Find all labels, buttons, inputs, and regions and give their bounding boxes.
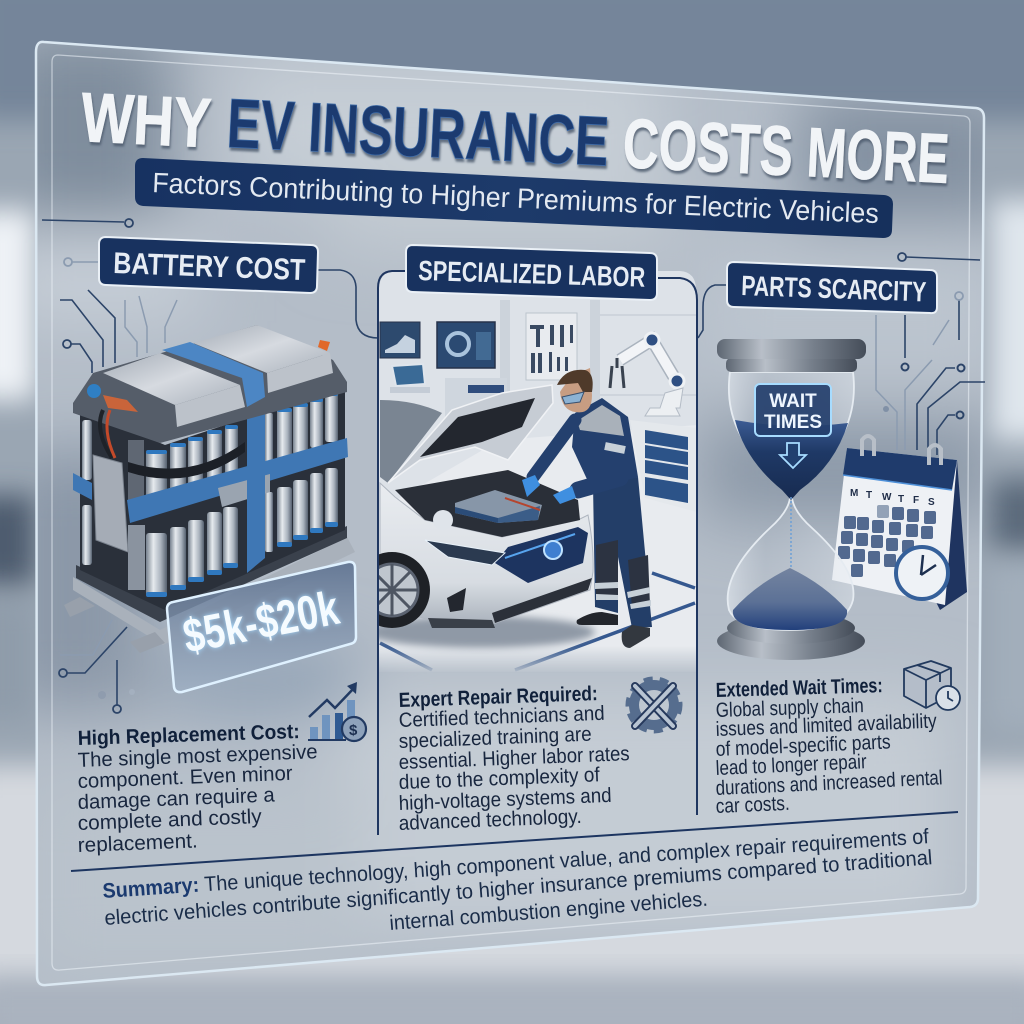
calendar: T (866, 490, 872, 501)
text block: expert repair required: Certified technicians and (398, 702, 605, 732)
battery base tray (64, 526, 355, 653)
electric car (354, 385, 595, 648)
panel: battery cost illustration (64, 325, 355, 653)
text block: expert repair required: Expert Repair Required: (398, 682, 598, 712)
summary text: Summary: The unique technology, high component value, and complex repair requirements of (102, 825, 930, 903)
text block: expert repair required: due to the complexity of (398, 763, 600, 794)
calendar: S (928, 497, 935, 508)
text block: extended wait times (715, 674, 943, 818)
top tray and lids (73, 325, 347, 443)
panel: parts scarcity illustration (717, 339, 967, 660)
title: MORE (805, 113, 951, 198)
heading: parts scarcity: PARTS SCARCITY (741, 270, 927, 307)
text block: extended wait times: car costs. (715, 792, 790, 818)
summary text: electric vehicles contribute significantly to higher insurance premiums compared to traditional (104, 846, 933, 930)
panel: specialized labor (354, 271, 697, 835)
hourglass cap (717, 339, 866, 372)
icon: wrench and gear (628, 679, 680, 731)
calendar: W (882, 492, 892, 503)
icon: rising chart with coin (308, 682, 366, 741)
wall screens (380, 322, 495, 368)
calendar (832, 436, 967, 610)
calendar: T (898, 494, 904, 505)
text block: extended wait times: issues and limited availability (715, 710, 938, 741)
text block: high replacement cost (77, 720, 318, 857)
title: COSTS (621, 104, 795, 190)
dark cell backing (80, 385, 345, 610)
text block: expert repair required: high-voltage systems and (398, 784, 612, 815)
cables and connectors (87, 384, 138, 458)
text block: high replacement cost: component. Even minor (77, 762, 293, 793)
calendar: M (850, 488, 858, 499)
circuit traces (42, 219, 985, 713)
wait times label: WAIT (769, 391, 817, 412)
heading: battery cost (99, 237, 318, 293)
title: WHY (79, 78, 213, 162)
text block: high replacement cost: complete and costly (77, 805, 263, 835)
workshop scene (354, 271, 697, 672)
text block: extended wait times: Global supply chain (715, 694, 864, 722)
heading: battery cost: BATTERY COST (113, 247, 306, 287)
text block: extended wait times: durations and increased rental (715, 766, 943, 800)
heading: parts scarcity (727, 262, 937, 313)
heading: specialized labor: SPECIALIZED LABOR (418, 255, 646, 293)
laptop and desk (390, 365, 504, 416)
icon: rising chart with coin: $ (349, 722, 358, 739)
summary text: internal combustion engine vehicles. (389, 888, 708, 935)
price tag: $5k-$20k (179, 582, 343, 664)
text block: high replacement cost: The single most expensive (77, 740, 318, 772)
text block: high replacement cost: damage can require a (77, 783, 276, 814)
text block: extended wait times: lead to longer repair (715, 750, 867, 780)
battery cells (82, 392, 338, 597)
tool board (526, 313, 577, 380)
heading: specialized labor (406, 245, 657, 300)
wait times label: TIMES (764, 412, 822, 433)
upper sand (735, 420, 848, 500)
text block: extended wait times: of model-specific parts (715, 730, 891, 761)
floor lines (380, 573, 695, 670)
hourglass base (717, 612, 865, 660)
text block: expert repair required: essential. Higher labor rates (398, 742, 630, 774)
frame line (378, 271, 697, 835)
blue straps (73, 400, 348, 573)
robot arm (610, 333, 684, 416)
icon: box and clock (904, 661, 960, 710)
text block: high replacement cost: High Replacement Cost: (77, 720, 300, 750)
title: EV INSURANCE (225, 84, 611, 181)
text block: expert repair required: advanced technology. (398, 805, 582, 835)
title (79, 78, 951, 198)
wait times label (755, 384, 831, 468)
hourglass glass (728, 372, 854, 630)
text block: expert repair required (398, 682, 630, 835)
subtitle banner: Factors Contributing to Higher Premiums for Electric Vehicles (152, 167, 879, 229)
lower sand (733, 568, 847, 630)
text block: extended wait times: Extended Wait Times: (715, 674, 883, 702)
control module (93, 455, 128, 552)
text block: expert repair required: specialized training are (398, 723, 592, 753)
text block: high replacement cost: replacement. (77, 829, 198, 857)
technician (522, 368, 652, 648)
calendar: F (913, 495, 919, 506)
price tag: $5k-$20k (179, 582, 343, 664)
price tag (167, 562, 356, 692)
tool cabinet (645, 430, 688, 503)
